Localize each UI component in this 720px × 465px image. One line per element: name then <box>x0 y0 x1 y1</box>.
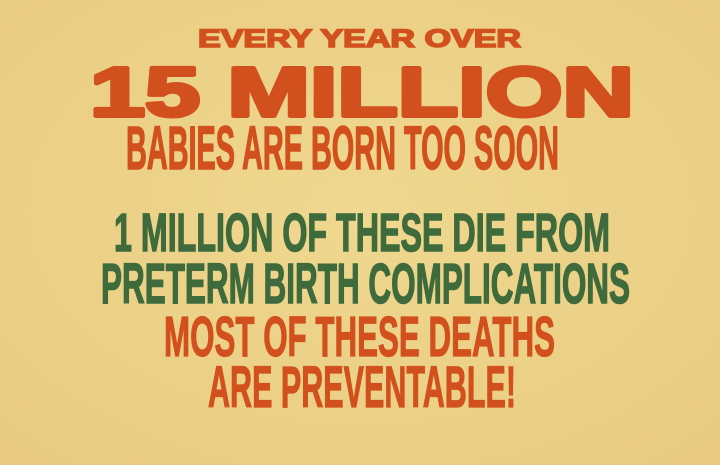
heading: every year over: EVERY YEAR OVER <box>198 25 521 53</box>
big number: 15 million: 15 MILLION <box>90 53 634 131</box>
